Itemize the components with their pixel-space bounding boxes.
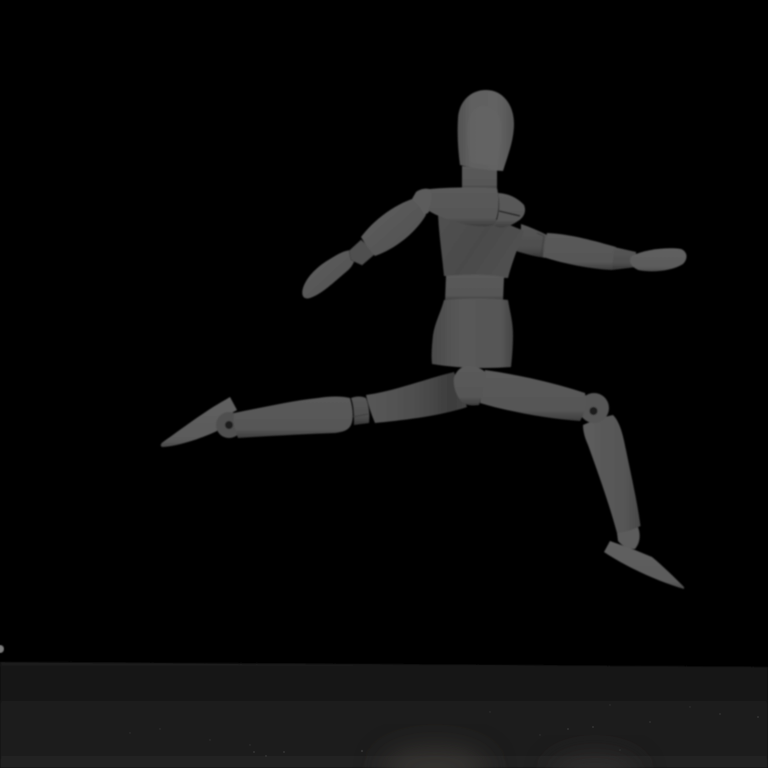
wrist <box>612 247 636 270</box>
forearm <box>543 233 616 270</box>
waist <box>445 275 504 301</box>
viewer-right leg <box>480 370 684 589</box>
forearm <box>361 199 426 256</box>
foot <box>604 541 684 589</box>
hand <box>630 248 687 271</box>
small object at left edge <box>0 645 4 653</box>
hand <box>302 250 355 298</box>
knee screw <box>590 407 598 415</box>
mannequin <box>161 90 687 589</box>
pelvis <box>432 298 513 368</box>
hip ball <box>454 366 486 405</box>
head <box>458 90 514 171</box>
ankle joint <box>216 412 242 438</box>
knee joint <box>351 396 369 425</box>
shoulder ball <box>412 189 433 215</box>
crossing upper arm <box>428 187 499 226</box>
crossing hand <box>495 193 525 227</box>
ankle joint <box>617 527 640 549</box>
thigh <box>366 372 467 423</box>
tabletop floor <box>0 662 768 768</box>
shoulder joint <box>516 224 547 258</box>
foot <box>161 397 237 447</box>
torso <box>438 214 524 278</box>
wrist joint <box>349 240 376 265</box>
right arm (viewer right) <box>516 224 687 271</box>
viewer-left leg <box>161 372 467 447</box>
ankle screw <box>225 421 233 429</box>
knee joint <box>579 393 609 423</box>
shin <box>583 415 640 533</box>
neck <box>462 166 497 190</box>
calf <box>234 396 353 438</box>
thigh <box>480 370 586 421</box>
left arm (viewer left) <box>302 189 433 298</box>
